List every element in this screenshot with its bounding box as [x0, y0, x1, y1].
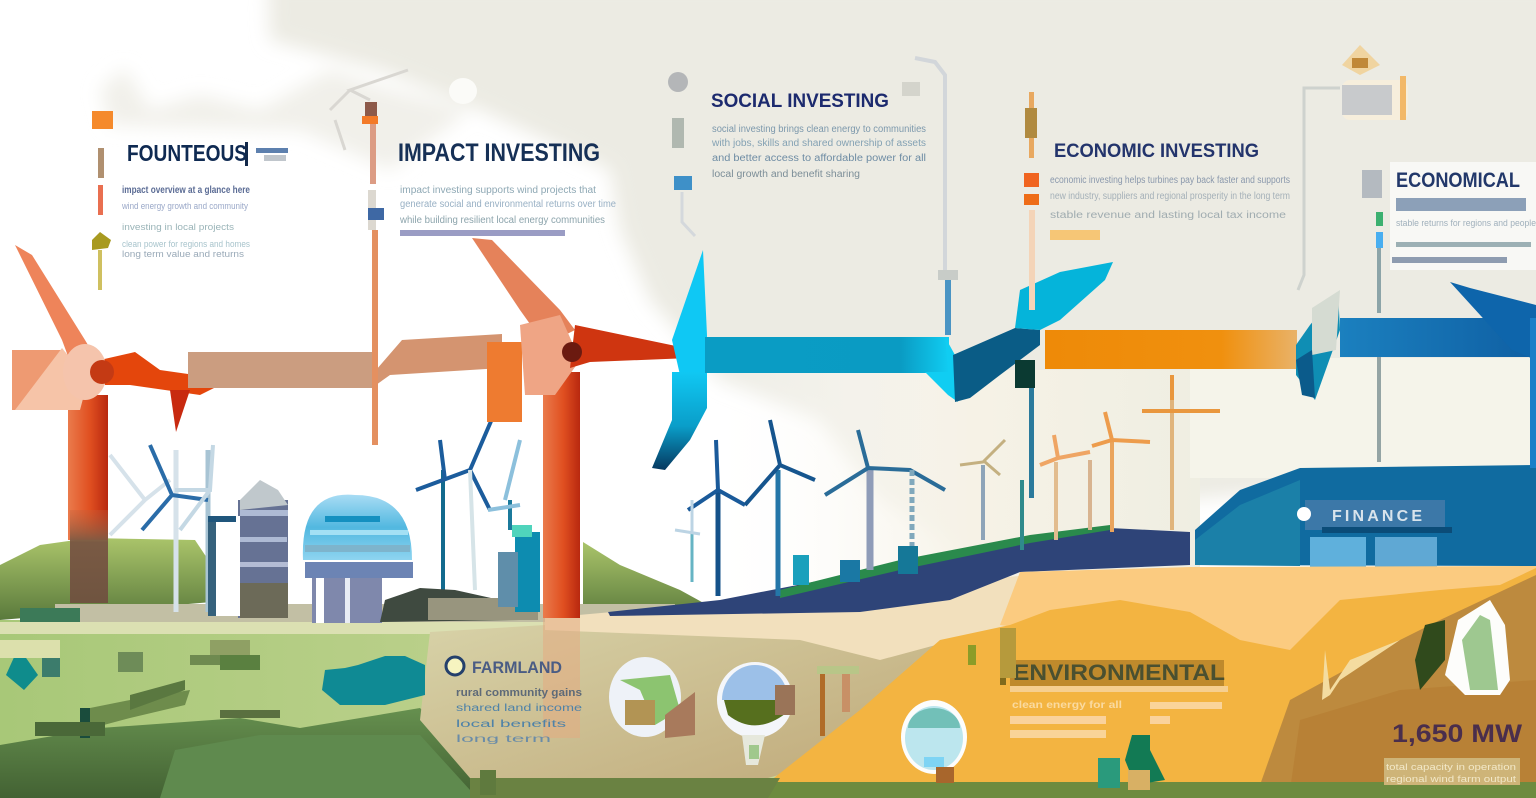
text block: heading 1 [121, 140, 288, 259]
text block: heading 4: stable revenue and lasting local tax income [1050, 210, 1287, 221]
text block: heading 2: IMPACT INVESTING [398, 139, 600, 167]
text block: heading 1: clean power for regions and homes [122, 239, 250, 249]
text block: green field label: shared land income [456, 703, 583, 714]
body text 3: social investing brings clean energy to communities [712, 124, 926, 135]
turbine 2 red [472, 238, 695, 618]
text block: heading 1: wind energy growth and community [121, 201, 248, 211]
text block: heading 2 [398, 139, 616, 236]
orange band [1045, 330, 1297, 369]
small wind turbines, blue group [110, 405, 1022, 612]
dome building [303, 495, 538, 623]
body text 1: impact overview at a glance here [122, 185, 250, 196]
navy ramp with green top [608, 525, 1190, 616]
text block: heading 3: local growth and benefit sharing [712, 169, 860, 180]
text block: orange hill heading [1000, 655, 1228, 738]
icon column 1 [92, 111, 113, 290]
text block: lower right figure: total capacity in operation [1386, 762, 1516, 772]
text block: heading 4 [1050, 141, 1290, 240]
text block: heading 1: investing in local projects [122, 222, 235, 232]
text block: heading 3: and better access to affordable power for all [712, 153, 926, 164]
icon: green trees on field [0, 608, 496, 795]
text block: green field label: local benefits [456, 719, 566, 730]
label: blue panel heading: FINANCE [1332, 508, 1422, 525]
label: blue panel heading [1297, 500, 1452, 533]
text block: heading 4: ECONOMIC INVESTING [1054, 141, 1259, 162]
body text 2: impact investing supports wind projects that [400, 185, 596, 196]
icon: round badge water [901, 700, 967, 783]
text block: heading 5: ECONOMICAL [1396, 169, 1520, 192]
badge: sun icon callout [1342, 45, 1408, 120]
orange hill body text: clean energy for all [1012, 700, 1122, 711]
connector curve 2 [330, 70, 408, 150]
text block: lower right figure: 1,650 MW [1392, 720, 1522, 748]
teal building [498, 525, 540, 612]
text block: green field label [446, 657, 583, 745]
icon column 4 [1024, 92, 1039, 310]
icon: palm tree [817, 666, 859, 736]
text block: heading 1: FOUNTEOUS [127, 140, 247, 166]
text block: green field label: long term [456, 734, 551, 745]
body text 4: economic investing helps turbines pay back faster and supports [1050, 175, 1290, 186]
band 1 peach [188, 334, 502, 388]
text block: heading 3: SOCIAL INVESTING [711, 91, 889, 112]
text block: heading 1: long term value and returns [122, 249, 245, 259]
icon: small trees [968, 628, 1165, 790]
ground: green hills [0, 538, 800, 798]
panel: beige foreground terrace [420, 575, 1030, 778]
text block: lower right figure [1384, 720, 1522, 785]
blue data tiles [1310, 537, 1437, 567]
turbine 3 cyan blue [652, 250, 958, 470]
connector line 3 [902, 58, 958, 335]
factory buildings [208, 480, 288, 618]
icon: white leaf badge [1415, 600, 1510, 695]
icon: leaf streak [1322, 640, 1400, 700]
icon column 2 [362, 102, 384, 445]
text block: lower right figure: regional wind farm output [1386, 774, 1517, 784]
panel: blue building base [1195, 465, 1536, 567]
turbine 1 red [12, 245, 230, 603]
text block: heading 5 [1390, 162, 1536, 270]
teal small buildings [793, 546, 918, 585]
icon column 5 [1362, 170, 1383, 462]
text block: heading 2: generate social and environmental returns over time [400, 199, 616, 210]
text block: heading 3 [711, 91, 926, 180]
turbine 4 teal [953, 262, 1113, 498]
turbine 5 blue [1296, 282, 1536, 468]
text block: orange hill heading: ENVIRONMENTAL [1013, 660, 1225, 685]
text block: green field label: FARMLAND [472, 658, 562, 677]
connector line 4 [1298, 88, 1340, 290]
icon column 3 [668, 72, 695, 236]
sand and orange hills [470, 566, 1536, 798]
text block: heading 4: new industry, suppliers and regional prosperity in the long term [1050, 191, 1290, 202]
text block: heading 3: with jobs, skills and shared ownership of assets [711, 138, 926, 149]
icon: round badge landscape [717, 662, 795, 765]
small wind turbines, orange group [1040, 375, 1220, 540]
icon: round badge plants [609, 657, 695, 738]
text block: green field label: rural community gains [456, 687, 582, 699]
body text 5 [1396, 198, 1526, 211]
text block: heading 2: while building resilient local energy communities [399, 215, 605, 226]
